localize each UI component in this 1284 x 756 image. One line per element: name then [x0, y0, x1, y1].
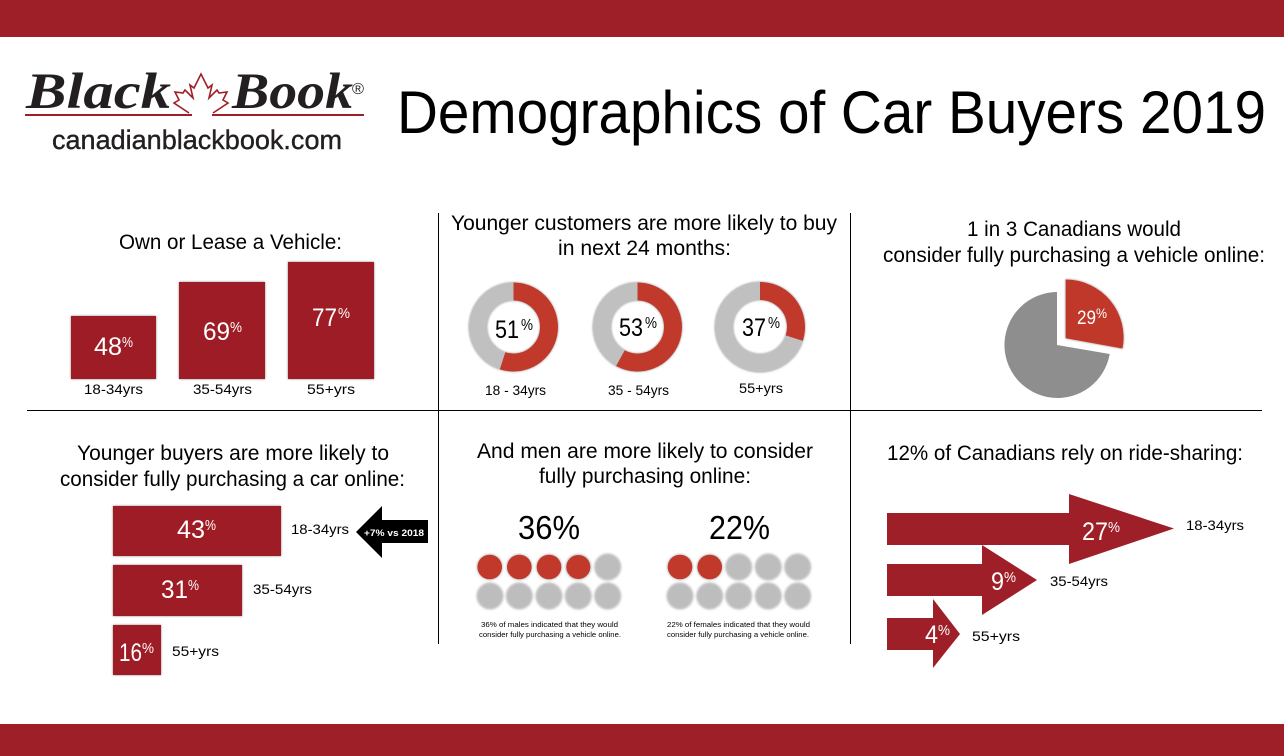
panel: own or lease: [71, 231, 374, 397]
bar 35-54: 35-54yrs: [193, 381, 252, 397]
bar 31%: 35-54yrs: [253, 581, 312, 597]
bar 31%: 31: [161, 576, 188, 604]
donut 53%: 35 - 54yrs: [608, 382, 669, 398]
male stat: [476, 509, 621, 639]
heading: [451, 212, 838, 260]
male caption: 36% of males indicated that they would: [481, 620, 618, 629]
bar 31%: %: [188, 577, 199, 594]
bar 16%: %: [142, 640, 154, 657]
donut 51%: 18 - 34yrs: [485, 382, 546, 398]
donut 37%: 37: [742, 314, 766, 342]
registered mark: ®: [352, 81, 364, 98]
bar 43%: 43: [177, 516, 205, 544]
donut 37%: 55+yrs: [739, 380, 783, 396]
icon: maple leaf: [174, 74, 228, 113]
arrow: +7% vs 2018: +7% vs 2018: [364, 528, 424, 539]
arrow 27%: 27: [1082, 518, 1108, 546]
donut 53%: [602, 292, 673, 398]
heading: Younger buyers are more likely to: [77, 442, 389, 465]
dot grid: males: [476, 554, 621, 610]
heading: 12% of Canadians rely on ride-sharing:: [887, 442, 1243, 465]
bar 16%: [113, 625, 219, 675]
heading: consider fully purchasing a vehicle online:: [883, 244, 1265, 267]
bar 18-34: %: [122, 334, 133, 351]
arrow 27%: [887, 494, 1244, 564]
dot grid: females: [666, 554, 811, 610]
male caption: [479, 620, 621, 639]
heading: consider fully purchasing a car online:: [60, 468, 405, 491]
arrow 4%: 55+yrs: [972, 628, 1020, 644]
pie chart: [1004, 280, 1124, 398]
arrow 27%: %: [1108, 519, 1120, 536]
bar 18-34: 18-34yrs: [84, 381, 143, 397]
arrow: +7% vs 2018: [356, 506, 428, 558]
logo rule right: [212, 114, 364, 116]
donut 51%: %: [521, 317, 533, 334]
donut 37%: [724, 291, 796, 396]
female caption: consider fully purchasing a vehicle online.: [667, 630, 809, 639]
heading: 1 in 3 Canadians would: [967, 218, 1181, 241]
arrow 9%: 35-54yrs: [1050, 573, 1108, 589]
bar 55+: [288, 262, 374, 397]
arrow 9%: [887, 545, 1108, 615]
donut 51%: [478, 292, 549, 398]
arrow 4%: %: [938, 622, 950, 639]
bar 35-54: %: [230, 319, 242, 336]
arrow 27%: 18-34yrs: [1186, 517, 1244, 533]
heading: And men are more likely to consider: [477, 440, 813, 463]
arrow 4%: 4: [925, 621, 938, 649]
top banner: [0, 0, 1284, 37]
bar 43%: %: [205, 517, 216, 534]
bar 18-34: 48: [94, 333, 122, 361]
heading: fully purchasing online:: [539, 465, 751, 488]
donut 37%: %: [768, 315, 780, 332]
arrow 9%: %: [1004, 569, 1016, 586]
bar 43%: 18-34yrs: [291, 521, 349, 537]
bottom banner: [0, 724, 1284, 756]
donut 53%: 53: [619, 314, 643, 342]
heading: Own or Lease a Vehicle:: [119, 231, 342, 254]
male stat: 36%: [518, 509, 580, 546]
panel: men vs women: [476, 440, 813, 639]
pie chart: %: [1096, 305, 1107, 321]
bar 35-54: [179, 282, 265, 397]
bar 55+: 77: [312, 304, 337, 332]
heading: Younger customers are more likely to buy: [451, 212, 838, 235]
bar 16%: 16: [119, 639, 142, 667]
arrow 4%: [887, 599, 1020, 668]
donut 51%: 51: [495, 316, 519, 344]
logo: Black Book: [25, 64, 364, 155]
logo rule left: [25, 114, 192, 116]
bar 55+: 55+yrs: [307, 381, 355, 397]
panel: 1 in 3 Canadians online: [883, 218, 1265, 398]
female caption: 22% of females indicated that they would: [667, 620, 810, 629]
panel: younger customers likely to buy: [451, 212, 838, 398]
heading: [477, 440, 813, 488]
male caption: consider fully purchasing a vehicle online.: [479, 630, 621, 639]
bar 55+: %: [338, 305, 350, 322]
heading: [883, 218, 1265, 267]
heading: [60, 442, 405, 491]
panel: ride-sharing: [887, 442, 1244, 668]
logo wordmark Black: Black: [25, 64, 172, 120]
female stat: [666, 509, 811, 639]
donut 53%: %: [645, 315, 657, 332]
pie chart: 29: [1077, 308, 1096, 329]
panel: younger buyers online: [60, 442, 428, 675]
female caption: [667, 620, 810, 639]
arrow 9%: 9: [991, 568, 1004, 596]
bar 31%: [113, 565, 312, 616]
bar 18-34: [71, 316, 156, 397]
logo wordmark Book: Book: [231, 64, 354, 120]
logo url: canadianblackbook.com: [52, 125, 342, 155]
heading: in next 24 months:: [558, 237, 731, 260]
bar 43%: [113, 506, 349, 556]
bar 35-54: 69: [203, 318, 230, 346]
bar 16%: 55+yrs: [172, 643, 219, 659]
female stat: 22%: [709, 509, 770, 546]
